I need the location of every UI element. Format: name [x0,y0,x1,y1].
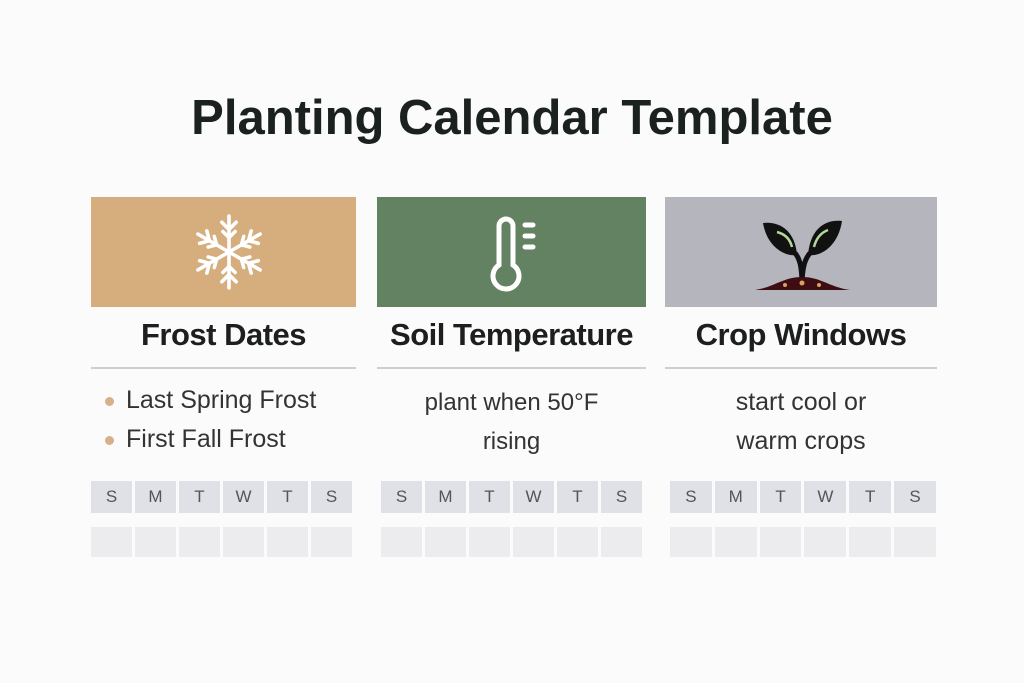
panel: frost dates: T [194,487,205,506]
panel: soil temperature: M [438,487,453,506]
panel: crop windows: W [817,487,833,506]
text: crop: start cool or [736,388,866,416]
panel: crop windows: M [729,487,743,506]
panel: frost dates: T [282,487,293,506]
calendar grid [381,481,642,557]
header: crop [665,197,937,307]
icon: thermometer [490,216,536,292]
panel: crop windows: S [685,487,697,506]
heading: frost dates: Frost Dates [141,317,306,352]
text: crop [736,388,866,455]
text: soil: plant when 50°F [425,389,598,416]
panel: soil temperature: S [396,487,407,506]
calendar grid [670,481,936,557]
panel: crop windows: T [865,487,875,506]
bullet list: First Fall Frost [126,425,286,453]
calendar grid [91,481,352,557]
text: soil: rising [483,428,540,455]
panel: frost dates [91,197,356,557]
text: soil [425,389,598,455]
heading: soil temperature: Soil Temperature [390,317,633,352]
panel: frost dates: W [235,487,252,506]
header: soil [377,197,646,307]
panel: frost dates: M [148,487,163,506]
text: crop: warm crops [736,427,866,455]
icon: seedling [755,220,850,290]
panel: crop windows: S [909,487,921,506]
panel: soil temperature: T [572,487,583,506]
panel: soil temperature: W [525,487,542,506]
panel: soil temperature [377,197,646,557]
panel: soil temperature: S [616,487,627,506]
panel: soil temperature: T [484,487,495,506]
icon: snowflake [196,214,262,290]
bullet list [105,386,316,453]
bullet list: Last Spring Frost [126,386,316,414]
header: frost [91,197,356,307]
panel: crop windows [665,197,937,557]
panel: crop windows: T [775,487,786,506]
title: Planting Calendar Template [191,91,833,145]
panel: frost dates: S [106,487,117,506]
panel: frost dates: S [326,487,337,506]
heading: crop windows: Crop Windows [696,317,906,352]
